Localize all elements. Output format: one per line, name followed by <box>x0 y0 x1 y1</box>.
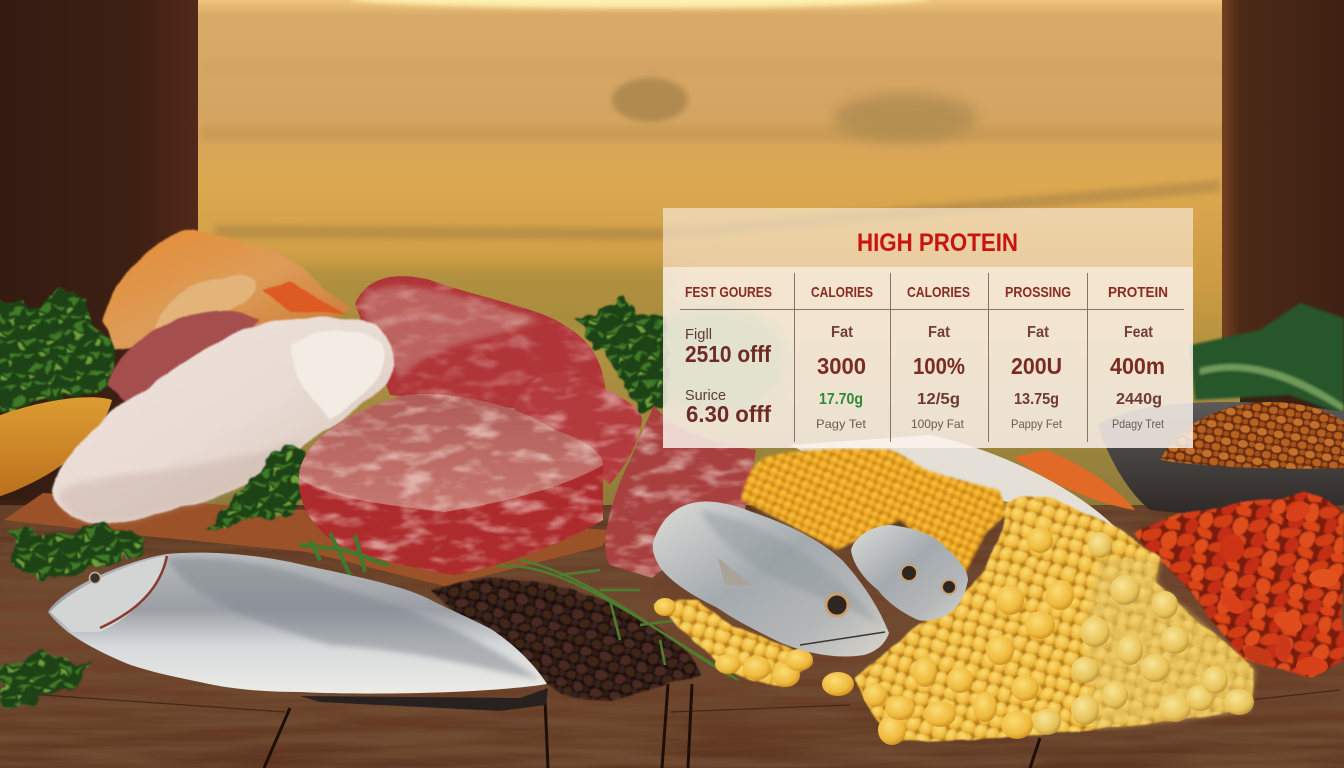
gram values row: 17.70g <box>819 391 863 408</box>
meat strip <box>605 405 756 578</box>
red meat back <box>350 270 610 410</box>
wooden table <box>0 505 1344 768</box>
loose kernel <box>822 672 854 696</box>
fat row: Fat <box>1027 324 1050 341</box>
column headers: PROSSING <box>1005 284 1071 301</box>
panel table body <box>663 267 1193 448</box>
herb under chicken <box>205 445 305 530</box>
red beans pile <box>1134 493 1344 677</box>
coffee-dark beans <box>430 580 702 702</box>
yellow corn pile <box>855 496 1255 745</box>
gram values row: 13.75g <box>1014 391 1059 408</box>
meat chunk right <box>514 374 642 484</box>
white plate <box>790 435 1118 530</box>
greens right <box>1190 303 1344 415</box>
row labels column: 2510 offf <box>685 341 771 367</box>
footnote row: Pappy Fet <box>1011 417 1063 431</box>
title: HIGH PROTEIN <box>857 229 1018 257</box>
bowl with brown beans <box>1098 402 1344 514</box>
small corn near fish <box>653 598 813 687</box>
footnote row <box>816 417 1165 431</box>
row labels column: Figll <box>685 326 712 343</box>
table grid <box>680 273 1184 442</box>
fat row <box>831 324 1154 341</box>
marbled steak <box>295 390 607 580</box>
column headers: CALORIES <box>907 284 970 301</box>
gram values row: 12/5g <box>917 391 960 408</box>
row labels column <box>685 326 771 427</box>
pale green haze behind panel <box>645 305 785 415</box>
column headers: PROTEIN <box>1108 284 1168 301</box>
large values row: 200U <box>1011 353 1062 379</box>
large silver fish <box>48 553 548 711</box>
fat row: Fat <box>928 324 951 341</box>
background: blurred farmland landscape <box>190 0 1240 510</box>
panel: high protein table <box>663 208 1193 448</box>
column headers: FEST GOURES <box>685 284 772 301</box>
fat row: Feat <box>1124 324 1154 341</box>
wooden window post left <box>0 0 198 500</box>
footnote row: Pagy Tet <box>816 417 867 431</box>
panel title band <box>663 208 1193 267</box>
large values row: 100% <box>913 353 965 379</box>
potato left <box>0 397 112 498</box>
greens behind meat <box>575 293 668 410</box>
rosemary sprig <box>497 560 738 680</box>
orange corn pile <box>741 449 1008 577</box>
red meat left <box>108 310 260 402</box>
large values row: 3000 <box>817 353 866 379</box>
footnote row: 100py Fat <box>911 417 965 431</box>
row labels column: Surice <box>685 387 726 404</box>
greens left <box>0 288 115 410</box>
large values row <box>817 353 1165 379</box>
column headers <box>685 284 1168 301</box>
gram values row: 2440g <box>1116 391 1162 408</box>
row labels column: 6.30 offf <box>686 401 771 427</box>
cutting board <box>4 493 610 586</box>
fat row: Fat <box>831 324 854 341</box>
column headers: CALORIES <box>811 284 873 301</box>
wooden window post right <box>1222 0 1344 340</box>
medium silver fish <box>653 502 889 657</box>
white chicken breast <box>52 318 395 524</box>
carrot slice <box>1013 450 1135 510</box>
gram values row <box>819 391 1162 408</box>
orange poultry <box>102 230 350 350</box>
small silver fish <box>851 525 968 621</box>
large values row: 400m <box>1110 353 1165 379</box>
footnote row: Pdagy Tret <box>1112 417 1165 431</box>
herb sprigs <box>0 525 388 712</box>
